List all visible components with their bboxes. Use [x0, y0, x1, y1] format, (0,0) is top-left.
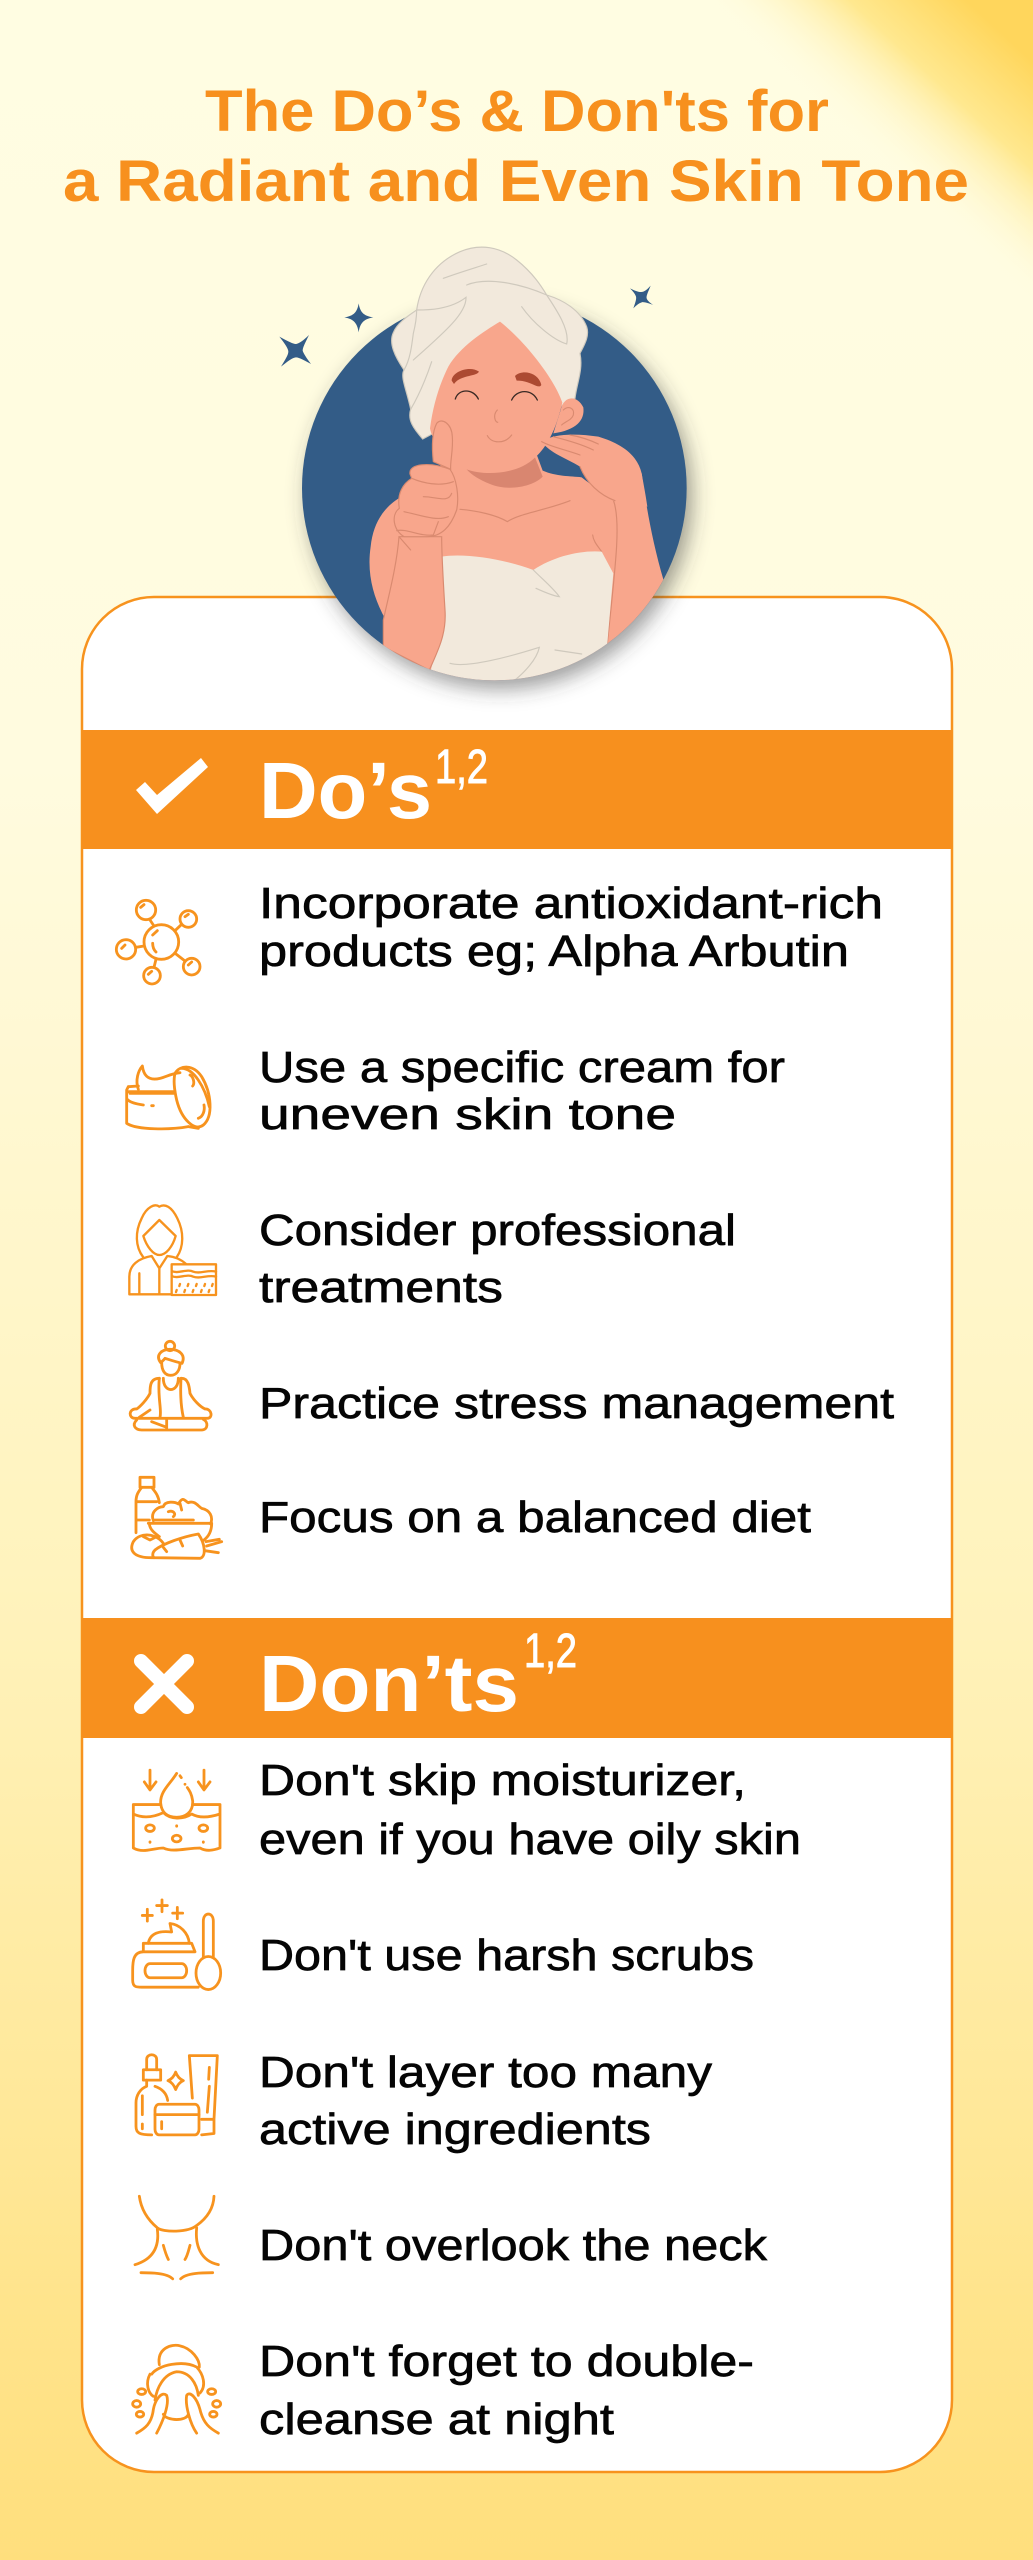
icon: check mark	[136, 758, 208, 814]
list: don'ts text: Don't overlook the neck	[259, 2221, 768, 2270]
raised hand	[542, 435, 647, 507]
list: don'ts text: Don't forget to double-	[259, 2337, 754, 2386]
list: do's text: products eg; Alpha Arbutin	[259, 927, 849, 976]
torso	[369, 450, 664, 687]
icon: cleansing face	[133, 2345, 221, 2433]
towel dress	[427, 551, 613, 687]
title: a Radiant and Even Skin Tone	[63, 149, 969, 214]
icon: molecule	[116, 900, 200, 984]
heading bar: Do's	[82, 730, 952, 849]
icon: sparkles	[279, 286, 653, 367]
icon: skincare products	[136, 2055, 217, 2135]
list: do's text: Use a specific cream for	[259, 1043, 785, 1092]
icon: meditation	[130, 1341, 211, 1430]
panel: white card	[82, 597, 952, 2472]
icon: balanced diet	[132, 1477, 222, 1558]
circle backdrop	[302, 296, 692, 689]
icon: moisturizer on skin	[133, 1770, 220, 1850]
heading text	[259, 1625, 577, 1728]
heading bar: Don'ts	[82, 1618, 952, 1738]
towel turban	[392, 247, 588, 439]
icon: woman with skin sample	[129, 1205, 216, 1295]
list: do's text: Practice stress management	[259, 1379, 894, 1428]
list: do's text	[259, 879, 894, 1542]
illustration: woman in towel giving thumbs up	[279, 247, 692, 689]
list: do's text: Focus on a balanced diet	[259, 1493, 811, 1542]
face	[430, 322, 562, 471]
heading text: Do’s	[259, 746, 432, 835]
list: don'ts text: even if you have oily skin	[259, 1815, 801, 1864]
heading text: Don’ts	[259, 1639, 519, 1728]
list: don'ts text: cleanse at night	[259, 2395, 614, 2444]
heading text: 1,2	[435, 741, 488, 794]
eyes, nose, mouth	[455, 391, 537, 400]
icon: neck	[135, 2196, 218, 2279]
list: don'ts text: Don't skip moisturizer,	[259, 1756, 746, 1805]
forearm and thumbs-up fist	[383, 421, 458, 670]
title: The Do’s & Don'ts for	[205, 79, 829, 144]
list: do's text: Consider professional	[259, 1206, 736, 1255]
eyebrows	[452, 369, 479, 384]
list: don'ts text: Don't use harsh scrubs	[259, 1931, 754, 1980]
neck shadow	[467, 457, 543, 488]
icon: scrub jar and spoon	[133, 1900, 221, 1990]
figure	[369, 247, 664, 687]
title	[63, 79, 969, 214]
list: do's text: Incorporate antioxidant-rich	[259, 879, 883, 928]
list: do's text: treatments	[259, 1263, 503, 1312]
list: do's text: uneven skin tone	[259, 1090, 676, 1139]
ear	[553, 398, 584, 433]
icon: cross mark	[141, 1661, 187, 1707]
heading text: 1,2	[524, 1625, 577, 1678]
list: don'ts text: Don't layer too many	[259, 2048, 712, 2097]
icon: cream jar	[127, 1066, 210, 1129]
list: don'ts text: active ingredients	[259, 2105, 651, 2154]
list: don'ts text	[259, 1756, 801, 2444]
